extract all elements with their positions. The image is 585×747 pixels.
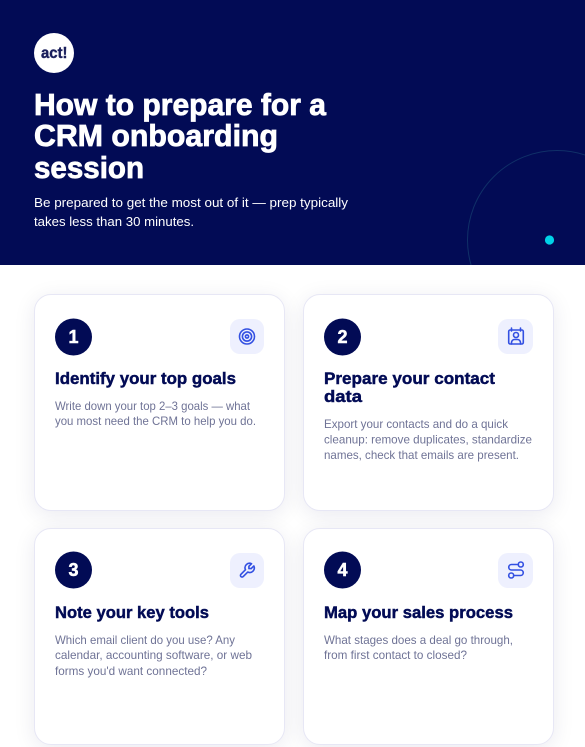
decorative ring: [468, 150, 585, 330]
number badge 1: 1: [68, 327, 79, 347]
panel: step 1 identify goals: [34, 294, 285, 511]
title: session: [34, 150, 144, 185]
heading: Identify your top goals: [55, 370, 236, 388]
heading: Map your sales process: [324, 604, 513, 622]
cyan dot: [545, 235, 554, 245]
number badge 4: [324, 552, 361, 588]
number badge 1: [55, 318, 92, 356]
title: How to prepare for a: [34, 87, 327, 122]
description: names, check that emails are present.: [324, 448, 519, 462]
description: Write down your top 2–3 goals — what: [55, 399, 251, 413]
number badge 2: 2: [337, 327, 348, 347]
act! logo: act!: [41, 45, 68, 62]
description: calendar, accounting software, or web: [55, 648, 252, 662]
title: [34, 87, 327, 185]
description: you most need the CRM to help you do.: [55, 414, 256, 428]
number badge 4: 4: [337, 560, 348, 580]
icon: target: [230, 319, 264, 354]
description: [55, 399, 256, 428]
heading: [324, 370, 496, 406]
panel: step 3 key tools: [34, 528, 285, 745]
heading: Prepare your contact: [324, 370, 496, 388]
subtitle: takes less than 30 minutes.: [34, 214, 194, 229]
description: from first contact to closed?: [324, 648, 467, 662]
heading: Note your key tools: [55, 604, 209, 622]
description: [324, 417, 532, 462]
description: forms you'd want connected?: [55, 664, 207, 678]
description: What stages does a deal go through,: [324, 633, 513, 647]
title: CRM onboarding: [34, 118, 278, 153]
description: cleanup: remove duplicates, standardize: [324, 432, 532, 446]
subtitle: Be prepared to get the most out of it — prep typically: [34, 195, 348, 210]
description: [55, 633, 252, 678]
act! logo: [34, 33, 74, 73]
icon: contact card: [498, 319, 533, 354]
icon: wrench: [230, 553, 264, 588]
panel: step 2 contact data: [303, 294, 554, 511]
description: Which email client do you use? Any: [55, 633, 235, 647]
number badge 2: [324, 318, 361, 356]
subtitle: [34, 195, 348, 229]
number badge 3: [55, 552, 92, 588]
number badge 3: 3: [68, 560, 79, 580]
panel: step 4 sales process: [303, 528, 554, 745]
header banner: [0, 0, 585, 265]
description: [324, 633, 513, 662]
description: Export your contacts and do a quick: [324, 417, 508, 431]
icon: route: [498, 553, 533, 588]
heading: data: [324, 388, 363, 406]
